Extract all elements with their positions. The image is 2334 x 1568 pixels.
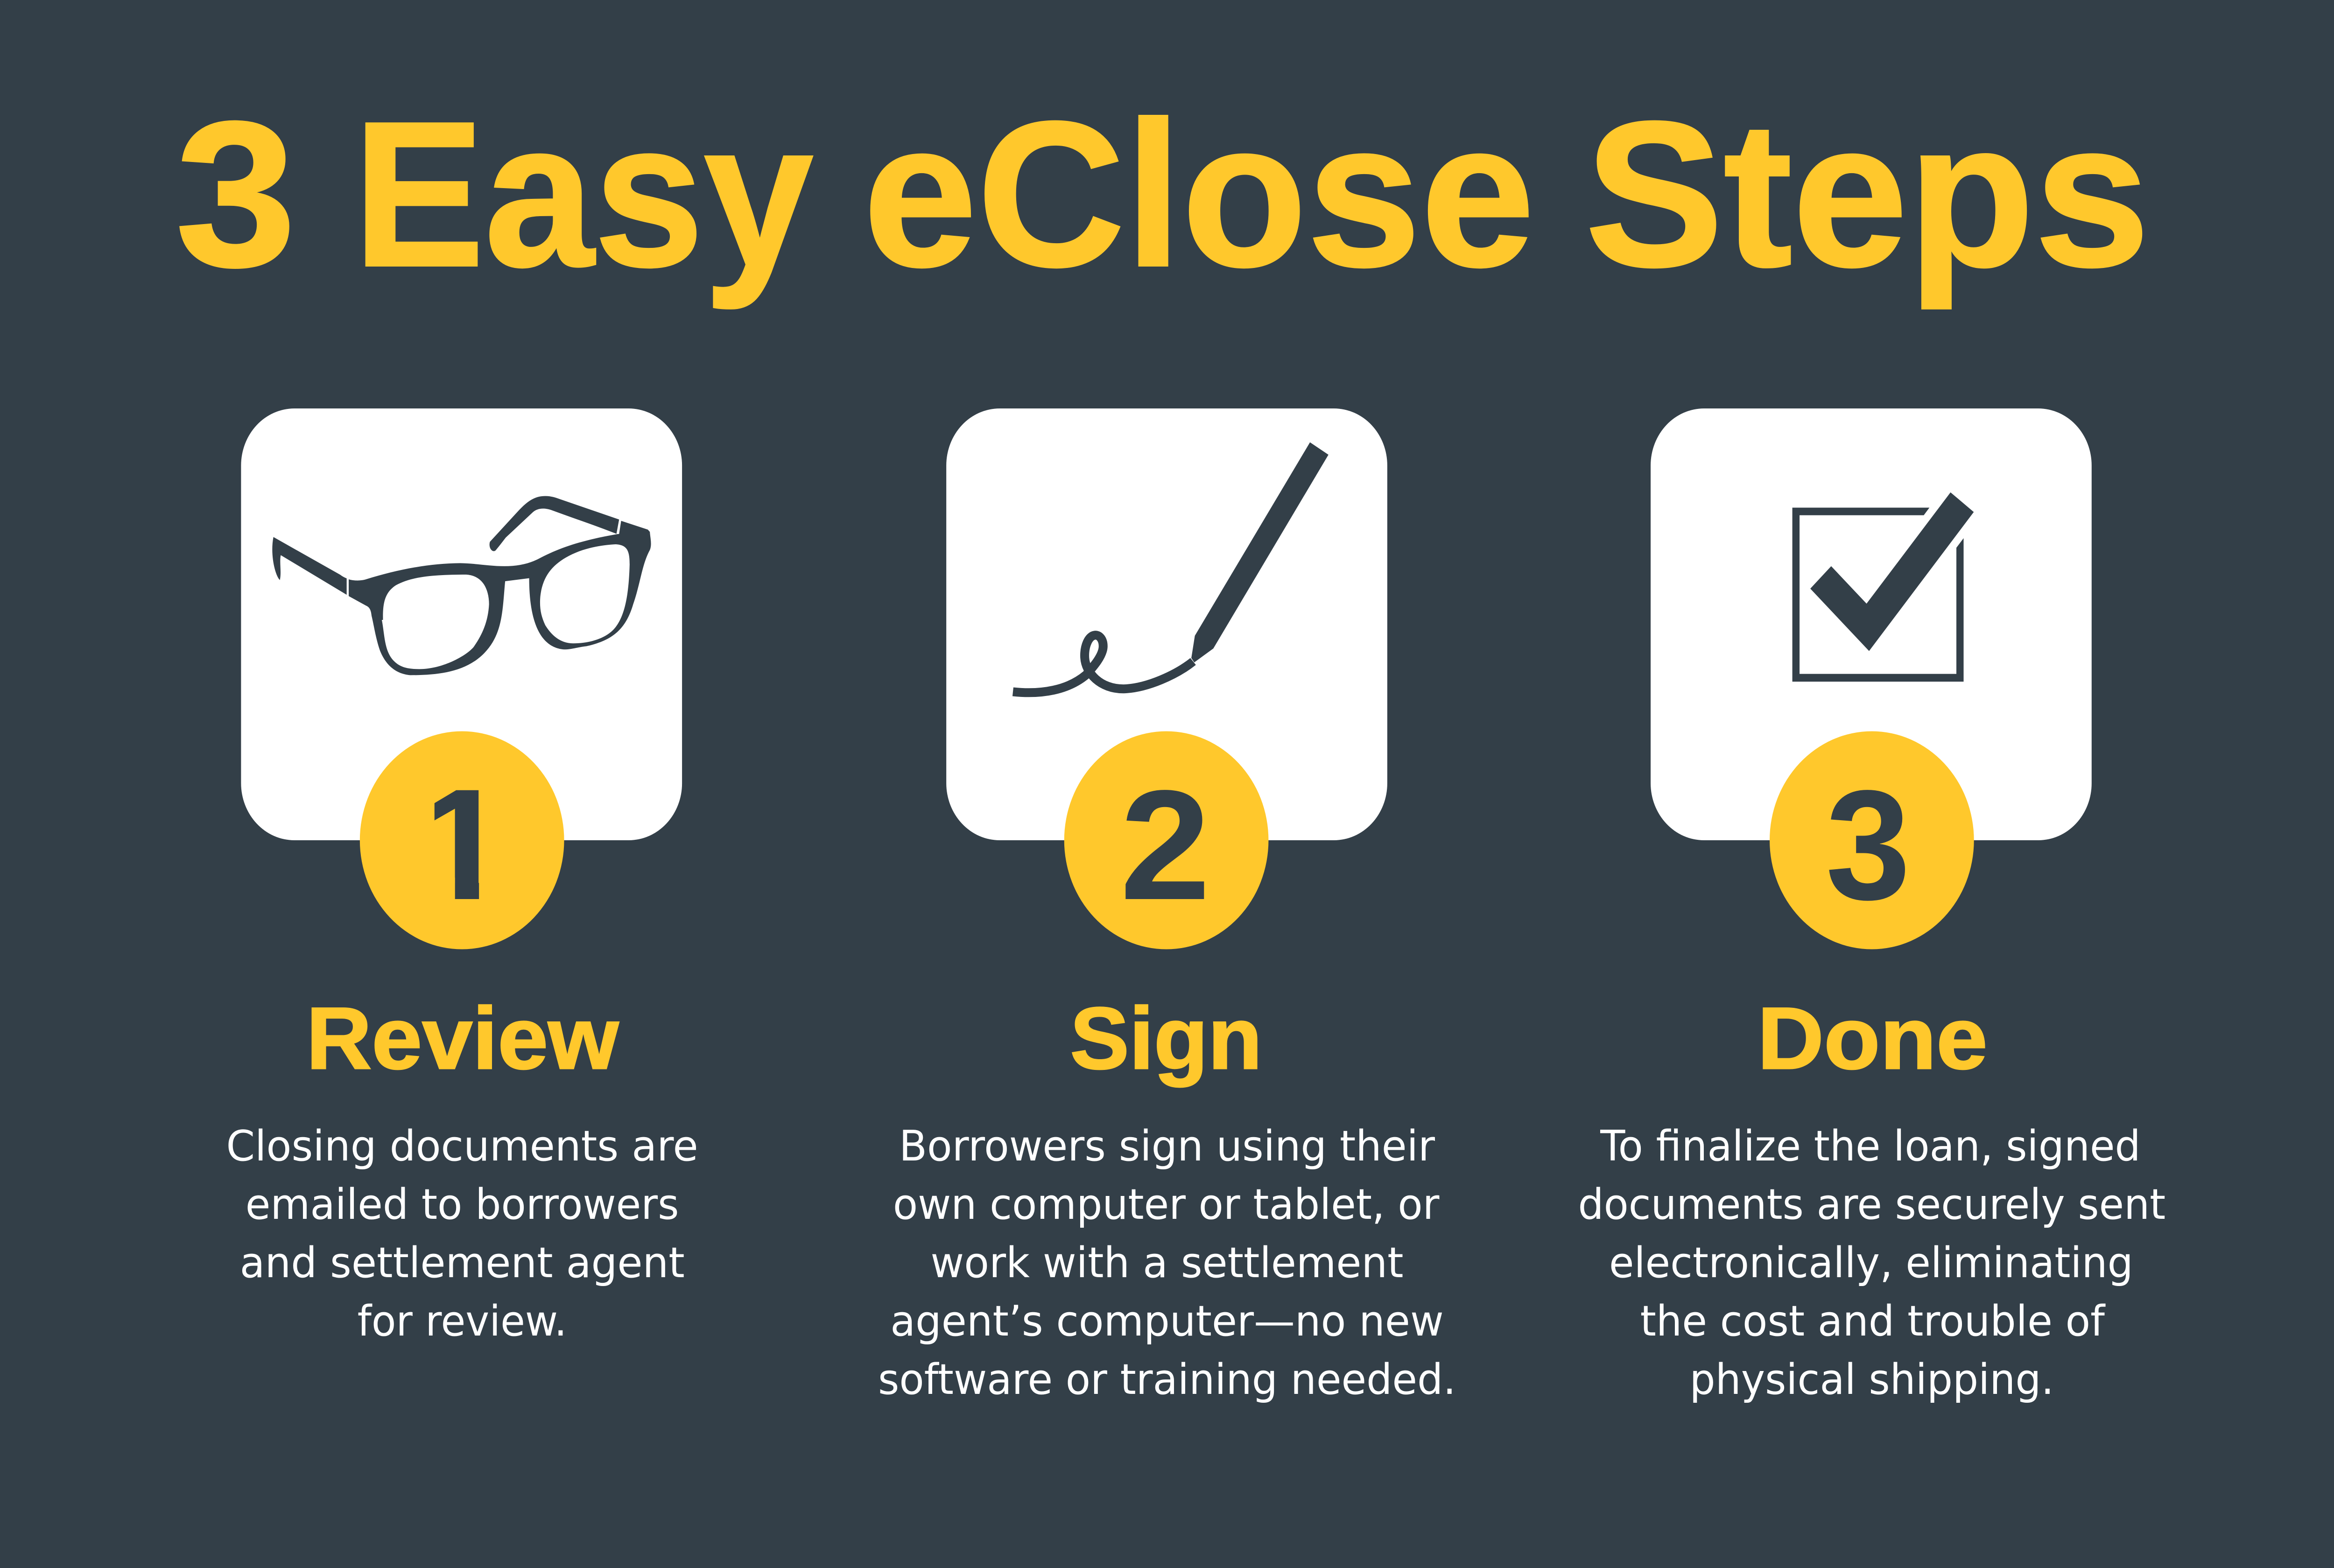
text: sign description: agent’s computer—no new <box>890 1296 1444 1346</box>
title: Easy <box>353 78 815 311</box>
heading: sign: Sign <box>1070 989 1262 1087</box>
number badge 3 <box>1770 731 1974 949</box>
card: step 1 <box>241 408 682 840</box>
text: sign description: Borrowers sign using their <box>899 1121 1435 1171</box>
heading: review: Review <box>306 989 619 1087</box>
text: review description: and settlement agent <box>240 1238 685 1287</box>
text: sign description: software or training needed. <box>878 1355 1456 1404</box>
card: step 3 <box>1651 408 2092 840</box>
title: eClose <box>863 78 1535 309</box>
text: review description: Closing documents are <box>226 1121 698 1171</box>
text: done description: documents are securely sent <box>1578 1180 2165 1229</box>
title: 3 <box>176 78 296 309</box>
number badge 2 <box>1064 731 1268 949</box>
number badge 3: 3 <box>1826 758 1911 932</box>
text: done description: the cost and trouble of <box>1640 1296 2106 1346</box>
number badge 2: 2 <box>1120 758 1210 932</box>
number badge 1 <box>360 731 564 949</box>
text: review description <box>226 1121 698 1346</box>
heading: done: Done <box>1758 989 1988 1087</box>
number badge 1: 1 <box>415 756 511 933</box>
text: done description: physical shipping. <box>1689 1355 2054 1404</box>
text: review description: for review. <box>358 1296 567 1346</box>
text: sign description <box>878 1121 1456 1404</box>
text: review description: emailed to borrowers <box>246 1180 679 1229</box>
icon: checkbox <box>1793 492 1974 682</box>
icon: pen signature <box>1013 443 1329 693</box>
text: done description: electronically, eliminating <box>1609 1238 2133 1287</box>
title: Steps <box>1585 78 2150 311</box>
card: step 2 <box>946 408 1387 840</box>
icon: glasses <box>272 496 651 675</box>
text: sign description: work with a settlement <box>930 1238 1404 1287</box>
panel: step 3 done <box>1578 408 2165 1404</box>
panel: step 2 sign <box>878 408 1456 1404</box>
text: done description: To finalize the loan, signed <box>1600 1121 2141 1171</box>
text: sign description: own computer or tablet, or <box>893 1180 1440 1229</box>
text: done description <box>1578 1121 2165 1404</box>
title <box>176 78 2150 311</box>
panel: step 1 review <box>226 408 698 1346</box>
